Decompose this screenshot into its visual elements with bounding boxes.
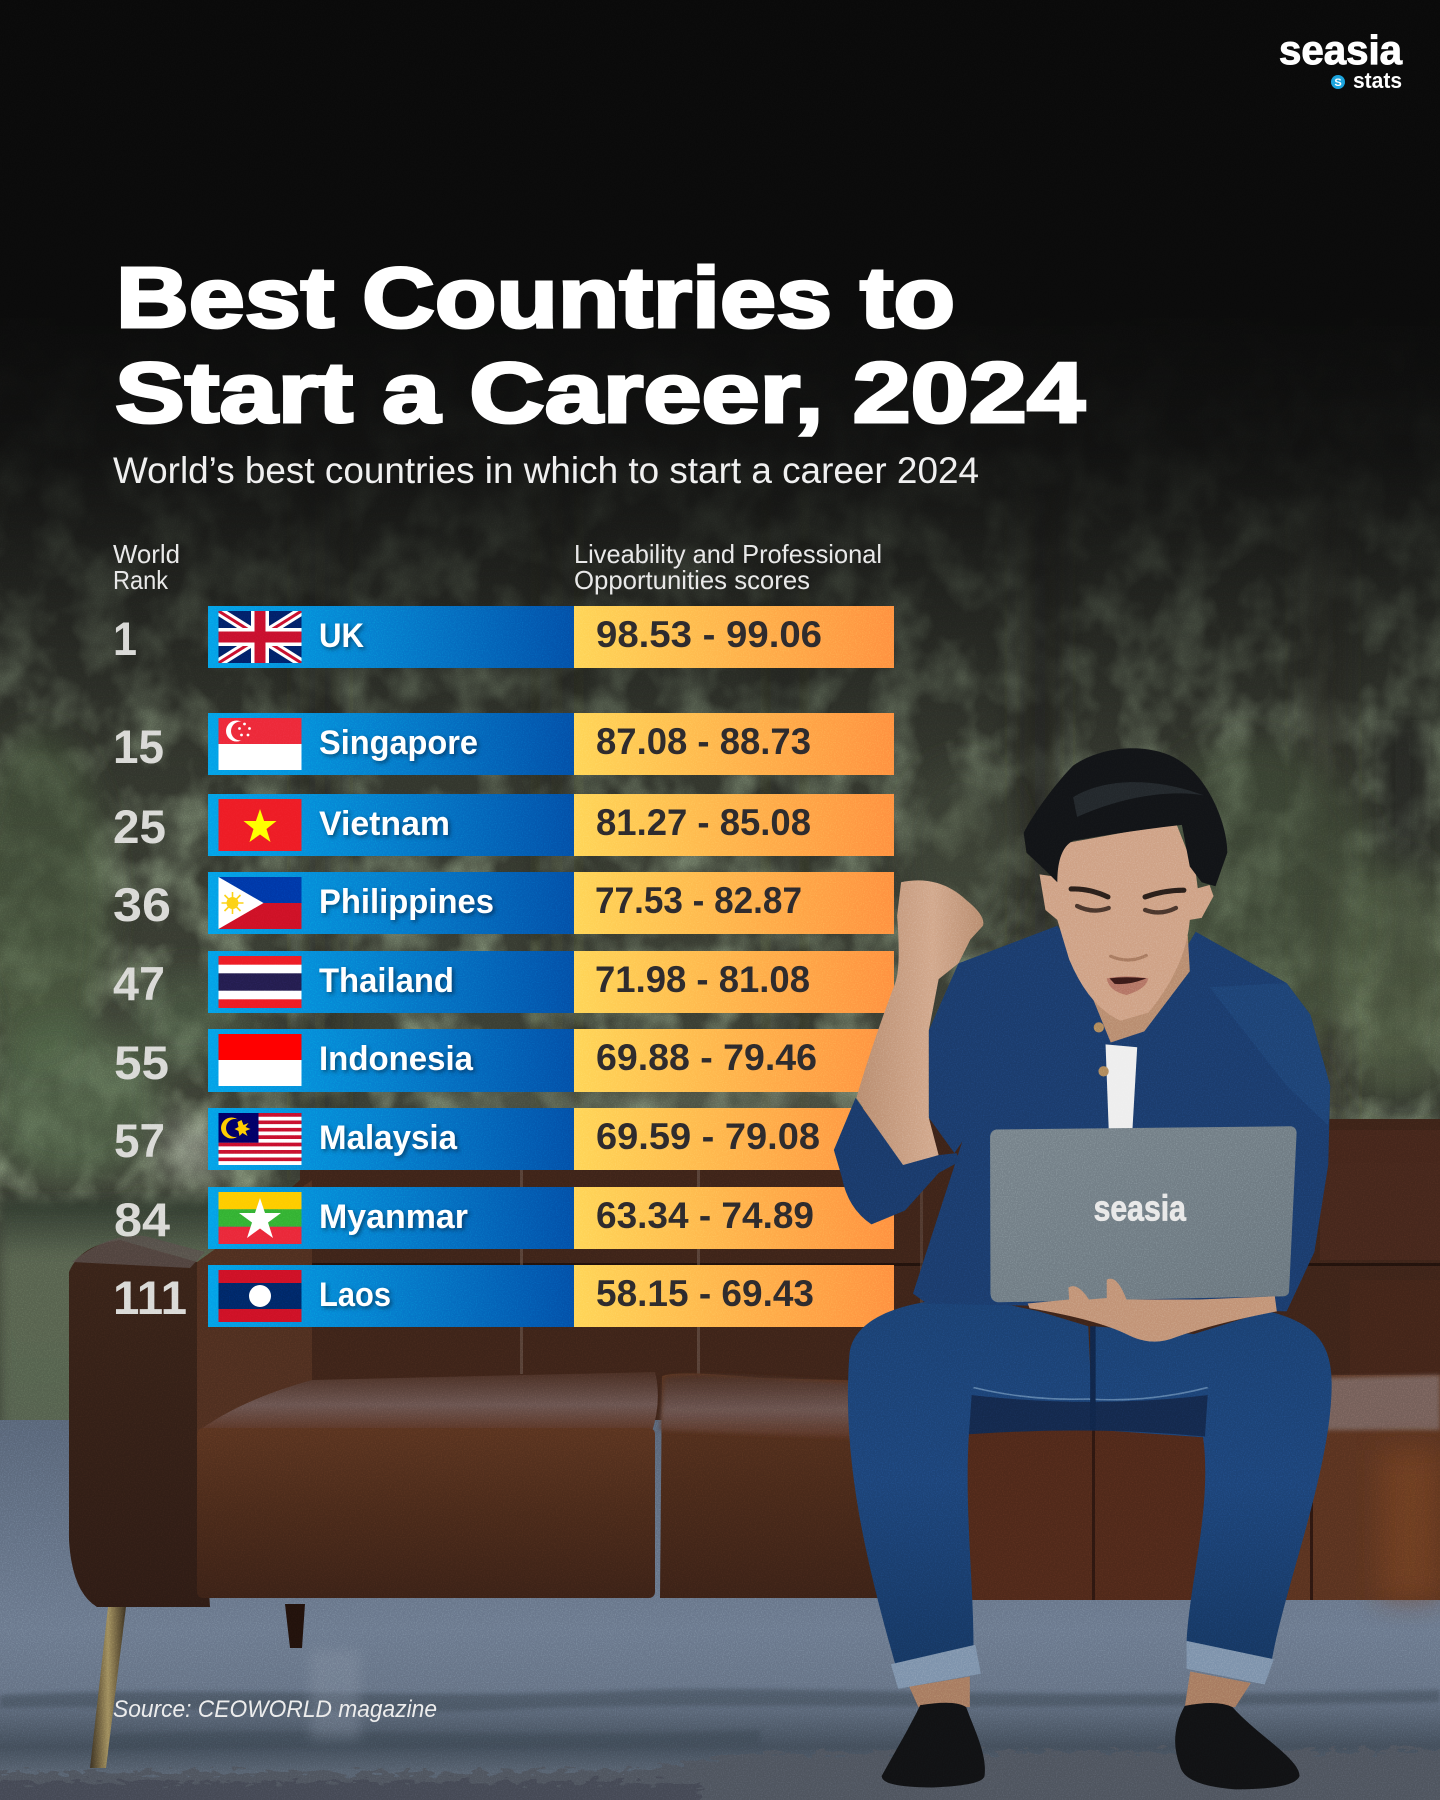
- column header: world rank: [113, 539, 180, 595]
- mouth: [1107, 976, 1148, 995]
- row: UK: 1: [113, 612, 137, 665]
- column header: scores: [574, 539, 882, 595]
- row: Laos: Laos: [319, 1276, 391, 1314]
- row: Malaysia: [114, 1108, 894, 1170]
- shirt buttons: [1094, 1022, 1109, 1076]
- row: Thailand: [113, 951, 894, 1013]
- row: Singapore: 15: [113, 720, 164, 773]
- row: Myanmar: Myanmar: [319, 1198, 468, 1236]
- row: Singapore: 87.08 - 88.73: [596, 721, 811, 762]
- row: Indonesia: 69.88 - 79.46: [596, 1037, 817, 1078]
- row: Philippines: Philippines: [319, 883, 494, 921]
- row: Thailand: 71.98 - 81.08: [595, 959, 810, 1000]
- white t-shirt: [1106, 1044, 1137, 1129]
- row: Philippines: 36: [113, 878, 171, 931]
- row: Myanmar: 63.34 - 74.89: [596, 1195, 814, 1236]
- face: [1040, 823, 1214, 1021]
- source: Source: CEOWORLD magazine: [113, 1696, 437, 1723]
- column header: world rank: World: [113, 539, 180, 569]
- logo stats: stats: [1353, 68, 1402, 93]
- flag: Malaysia: [218, 1113, 302, 1165]
- logo badge: S: [1334, 77, 1342, 89]
- row: UK: 98.53 - 99.06: [596, 614, 822, 655]
- row: Laos: [113, 1265, 894, 1327]
- hand holding laptop: [1028, 1279, 1277, 1342]
- column header: scores: Opportunities scores: [574, 565, 810, 595]
- flag: Philippines: [218, 877, 302, 929]
- row: Singapore: [113, 713, 894, 775]
- seat cushion middle: [660, 1373, 1000, 1598]
- hair: [1024, 748, 1227, 886]
- row: Vietnam: 25: [113, 800, 166, 853]
- row: UK: UK: [319, 617, 364, 655]
- brows and eyes: [1071, 889, 1184, 960]
- row: Malaysia: Malaysia: [319, 1119, 458, 1157]
- logo wordmark: seasia: [1279, 27, 1403, 73]
- row: Malaysia: 57: [114, 1114, 165, 1167]
- sofa arm: [69, 1240, 210, 1607]
- row: UK: [113, 606, 894, 668]
- title: [115, 251, 1085, 441]
- flag: Vietnam: [218, 799, 302, 851]
- row: Malaysia: 69.59 - 79.08: [596, 1116, 820, 1157]
- shirt torso: [913, 926, 1330, 1311]
- title: Start a Career, 2024: [115, 346, 1085, 441]
- neck: [1067, 936, 1190, 1042]
- rolled sleeve: [834, 1098, 960, 1224]
- laptop logo: seasia: [1094, 1187, 1186, 1228]
- row: Myanmar: [114, 1187, 894, 1249]
- man legs, jeans and socks: [848, 1298, 1332, 1789]
- row: Indonesia: Indonesia: [319, 1040, 474, 1078]
- row: Vietnam: Vietnam: [319, 805, 450, 843]
- row: Indonesia: [114, 1029, 894, 1092]
- row: Philippines: 77.53 - 82.87: [595, 880, 802, 921]
- row: Singapore: Singapore: [319, 724, 478, 762]
- row: Vietnam: [113, 794, 894, 856]
- logo: [1279, 27, 1403, 93]
- title: Best Countries to: [116, 251, 955, 346]
- row: Vietnam: 81.27 - 85.08: [596, 802, 811, 843]
- flag: Singapore: [218, 718, 302, 770]
- man with laptop: [834, 748, 1332, 1789]
- flag: Laos: [218, 1270, 302, 1322]
- seat cushion left front: [197, 1428, 655, 1598]
- row: Laos: 111: [113, 1271, 187, 1324]
- sofa legs: [90, 1607, 126, 1768]
- row: Laos: 58.15 - 69.43: [596, 1273, 814, 1314]
- sofa inner arm: [197, 1180, 312, 1432]
- seat cushion left top: [197, 1372, 658, 1432]
- seat front between legs: [960, 1428, 1260, 1600]
- sofa backrest: [197, 1119, 1440, 1420]
- flag: Indonesia: [218, 1034, 302, 1086]
- flag: Myanmar: [218, 1192, 302, 1244]
- row: Thailand: 47: [113, 957, 165, 1010]
- column header: scores: Liveability and Professional: [574, 539, 882, 569]
- raised forearm and fist: [856, 880, 983, 1167]
- row: Philippines: [113, 872, 894, 934]
- seat right: [1240, 1375, 1440, 1600]
- sofa: [69, 1119, 1440, 1768]
- flag: UK: [218, 611, 302, 663]
- column header: world rank: Rank: [113, 565, 169, 595]
- man upper body: [834, 748, 1330, 1342]
- row: Indonesia: 55: [114, 1036, 169, 1089]
- rug: [0, 1750, 1440, 1800]
- laptop: [990, 1126, 1297, 1302]
- flag: Thailand: [218, 956, 302, 1008]
- row: Myanmar: 84: [114, 1193, 170, 1246]
- subtitle: World’s best countries in which to start a career 2024: [113, 450, 979, 491]
- row: Thailand: Thailand: [319, 962, 454, 1000]
